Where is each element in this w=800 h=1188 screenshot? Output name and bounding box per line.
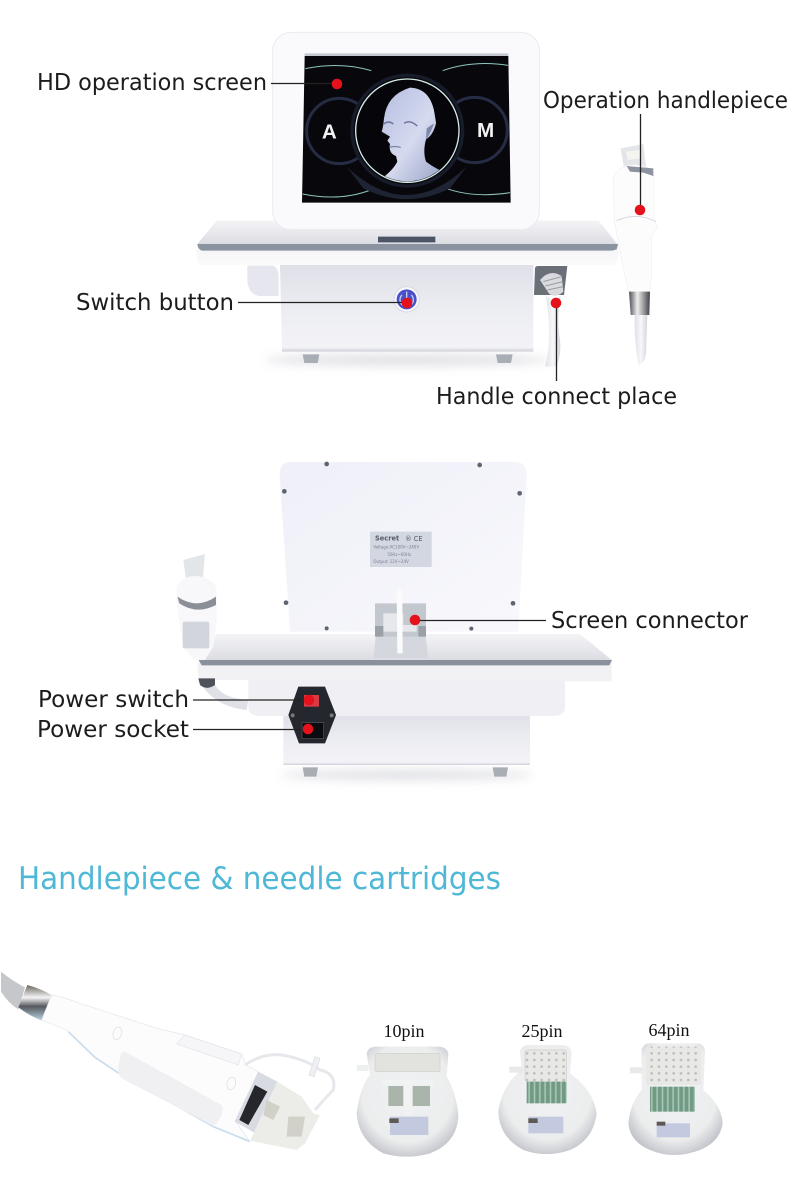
handle button marks bbox=[113, 1027, 236, 1090]
label: Power socket: Power socket bbox=[37, 717, 189, 743]
panel: 64pin cartridge bbox=[628, 1043, 723, 1155]
heading: Handlepiece and needle cartridges: Handlepiece & needle cartridges bbox=[18, 861, 501, 897]
label: Handle connect place: Handle connect place bbox=[436, 384, 677, 410]
label: HD operation screen: HD operation screen bbox=[37, 70, 267, 96]
label: Screen connector: Screen connector bbox=[551, 608, 749, 634]
power module plate bbox=[288, 687, 336, 743]
label: 25pin: 25pin bbox=[521, 1021, 563, 1041]
specification label bbox=[370, 532, 432, 567]
operation handpiece bbox=[613, 144, 657, 365]
specification label: ® CE bbox=[405, 535, 423, 543]
shadow under front device bbox=[263, 354, 550, 366]
tabletop bbox=[197, 221, 618, 265]
screen bezel bbox=[273, 32, 539, 230]
cartridge details bbox=[263, 1100, 305, 1137]
leader: Switch button bbox=[238, 298, 412, 308]
transparent cartridge bbox=[250, 1082, 320, 1150]
panel: rear view of device bbox=[177, 462, 612, 780]
leader: Handle connect place bbox=[551, 298, 561, 381]
screen connector bracket bbox=[373, 589, 428, 658]
metal ring bbox=[235, 1072, 277, 1133]
rear screen panel bbox=[280, 462, 527, 632]
handle cable bbox=[1, 972, 25, 1009]
specification label: Output: 12V~24V bbox=[373, 559, 409, 564]
device body bbox=[247, 265, 533, 363]
letter M: M bbox=[477, 119, 494, 142]
touch screen bbox=[302, 53, 511, 203]
shadow under rear device bbox=[280, 770, 533, 780]
tabletop rear bbox=[198, 634, 612, 681]
specification label: 50Hz~60Hz bbox=[387, 552, 411, 557]
panel: 10pin cartridge bbox=[357, 1047, 458, 1157]
leader: Operation handlepiece bbox=[635, 114, 645, 215]
chrome collar bbox=[18, 985, 52, 1021]
panel: 25pin cartridge bbox=[498, 1045, 597, 1154]
leader: Power socket bbox=[193, 724, 313, 734]
silicone tube bbox=[245, 1055, 334, 1110]
leader: Screen connector bbox=[410, 615, 546, 625]
rear handpiece bbox=[177, 554, 248, 710]
tube valve bbox=[309, 1057, 320, 1077]
label: Switch button: Switch button bbox=[76, 290, 234, 316]
handle top slider bbox=[177, 1035, 242, 1065]
handle side panel bbox=[118, 1051, 223, 1125]
letter A: A bbox=[322, 120, 337, 143]
label: 10pin: 10pin bbox=[383, 1021, 425, 1041]
panel: front view of device bbox=[197, 32, 657, 367]
icon: face bbox=[382, 88, 440, 182]
specification label: Voltage:AC100V~240V bbox=[373, 544, 419, 549]
specification label: Secret bbox=[375, 535, 400, 543]
label: Operation handlepiece: Operation handlepiece bbox=[543, 88, 788, 114]
handle underside edge bbox=[68, 1032, 249, 1141]
leader: Power switch bbox=[193, 695, 314, 705]
handle socket and plug bbox=[534, 266, 567, 367]
label: Power switch: Power switch bbox=[38, 687, 189, 713]
label: 64pin: 64pin bbox=[648, 1020, 690, 1040]
leader: HD operation screen bbox=[271, 79, 342, 89]
device body rear bbox=[248, 680, 565, 777]
handle body bbox=[42, 995, 258, 1142]
panel: handlepiece close-up bbox=[1, 972, 334, 1150]
black ring bbox=[239, 1085, 267, 1125]
icon: power button bbox=[394, 287, 419, 312]
